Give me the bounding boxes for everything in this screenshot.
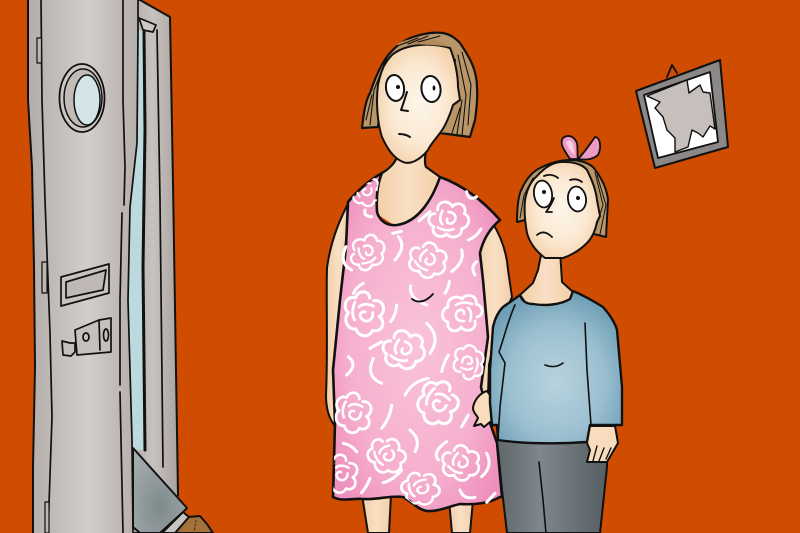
exposed backing (647, 80, 715, 152)
broken glass (644, 72, 718, 158)
porthole window (60, 64, 104, 132)
girl's eyes (532, 179, 588, 213)
dress dashes upper (343, 192, 481, 275)
glass side strip (128, 30, 146, 450)
picture hanger (667, 65, 677, 77)
broken picture on the wall (636, 60, 728, 168)
woman's left-side arm (326, 200, 350, 426)
blue sweater (490, 291, 622, 443)
sweater details (498, 305, 591, 438)
girl's hair back (517, 160, 608, 237)
door outlines (28, 0, 163, 533)
girl's neck (520, 250, 573, 307)
woman's right-side arm (476, 222, 512, 395)
dress dashes lower (343, 282, 495, 502)
woman's hand (473, 391, 497, 427)
dress flowers (333, 178, 485, 506)
dress black mark (412, 294, 433, 302)
neck outlines (382, 147, 440, 177)
intruder's trouser leg and shoe (133, 448, 213, 533)
door panel (28, 0, 138, 533)
door frame (128, 0, 178, 533)
door lock (62, 318, 111, 356)
picture frame (636, 60, 728, 168)
hinges (37, 38, 49, 533)
woman's hair strands (366, 36, 471, 136)
woman (320, 33, 512, 533)
woman's neck (376, 145, 441, 227)
girl's brows, nose, mouth (537, 175, 582, 237)
girl's hair strands (520, 172, 606, 234)
letter slot (61, 264, 109, 306)
girl's face (525, 162, 600, 258)
woman's legs (362, 495, 473, 533)
woman's eyes (384, 74, 442, 103)
pink dress (320, 172, 502, 511)
pink hair bow (562, 136, 600, 160)
door assembly (28, 0, 213, 533)
girl's trousers (497, 440, 607, 533)
woman's hair back (362, 33, 477, 137)
girl (490, 136, 622, 533)
girl's hand (587, 426, 618, 462)
woman's face (377, 45, 460, 163)
woman's nose and mouth (399, 92, 410, 137)
